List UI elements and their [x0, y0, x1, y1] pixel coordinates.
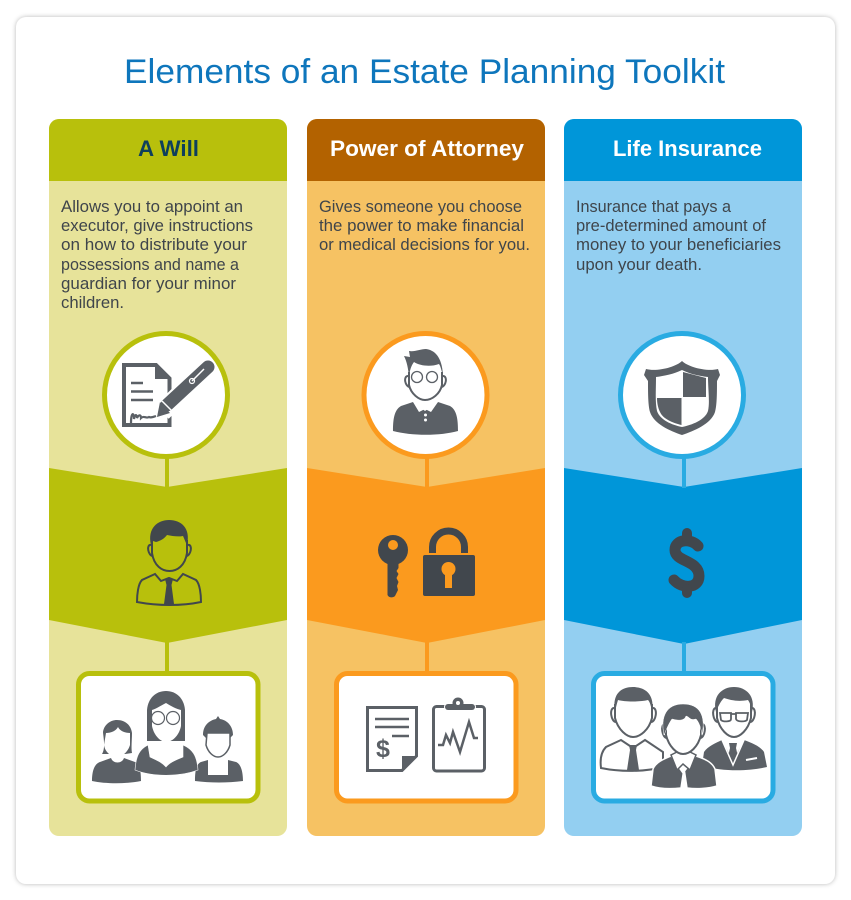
description: possessions and name a	[61, 256, 239, 274]
right man	[702, 687, 767, 770]
girl	[92, 720, 141, 783]
description: upon your death.	[576, 256, 702, 274]
band	[49, 468, 287, 643]
left man	[601, 687, 663, 771]
band	[564, 468, 802, 644]
boy	[195, 716, 243, 782]
connectors	[425, 455, 429, 674]
icon: key	[378, 535, 408, 597]
center man	[651, 704, 717, 789]
connectors	[165, 455, 169, 674]
description: guardian for your minor	[61, 275, 237, 293]
description: the power to make financial	[319, 217, 524, 235]
connectors	[682, 455, 686, 674]
icon: man with glasses	[364, 334, 487, 456]
description: children.	[61, 294, 124, 312]
description: on how to distribute your	[61, 236, 248, 254]
icon: financial documents	[336, 674, 516, 801]
panel background	[564, 119, 802, 836]
header: Power of Attorney: Power of Attorney	[330, 136, 525, 161]
description	[319, 198, 530, 254]
bill	[368, 708, 418, 772]
icon: family	[78, 674, 258, 801]
header: Power of Attorney	[307, 119, 545, 181]
description	[61, 198, 253, 312]
icon: document and pen	[104, 334, 228, 456]
icon: three businessmen	[594, 674, 773, 801]
description: Insurance that pays a	[576, 198, 731, 216]
panel background	[307, 119, 545, 836]
description: Allows you to appoint an	[61, 198, 243, 216]
header: A Will	[49, 119, 287, 181]
header: A Will: A Will	[138, 136, 199, 161]
panel: A Will	[49, 119, 287, 836]
header: Life Insurance	[564, 119, 802, 181]
panel: Power of Attorney	[307, 119, 545, 836]
clipboard	[434, 698, 484, 771]
icon: dollar sign	[674, 533, 699, 593]
woman	[135, 691, 198, 775]
bill: $	[376, 735, 390, 763]
icon: padlock	[423, 531, 475, 596]
icon: man with tie	[137, 520, 201, 605]
description	[576, 198, 781, 274]
icon: shield	[620, 334, 744, 456]
description: executor, give instructions	[61, 217, 253, 235]
panel background	[49, 119, 287, 836]
panel: Life Insurance	[564, 119, 802, 836]
title: Elements of an Estate Planning Toolkit	[124, 53, 726, 91]
description: money to your beneficiaries	[576, 236, 781, 254]
description: pre-determined amount of	[576, 217, 767, 235]
header: Life Insurance: Life Insurance	[613, 136, 762, 161]
description: or medical decisions for you.	[319, 236, 530, 254]
band	[307, 468, 545, 643]
description: Gives someone you choose	[319, 198, 522, 216]
